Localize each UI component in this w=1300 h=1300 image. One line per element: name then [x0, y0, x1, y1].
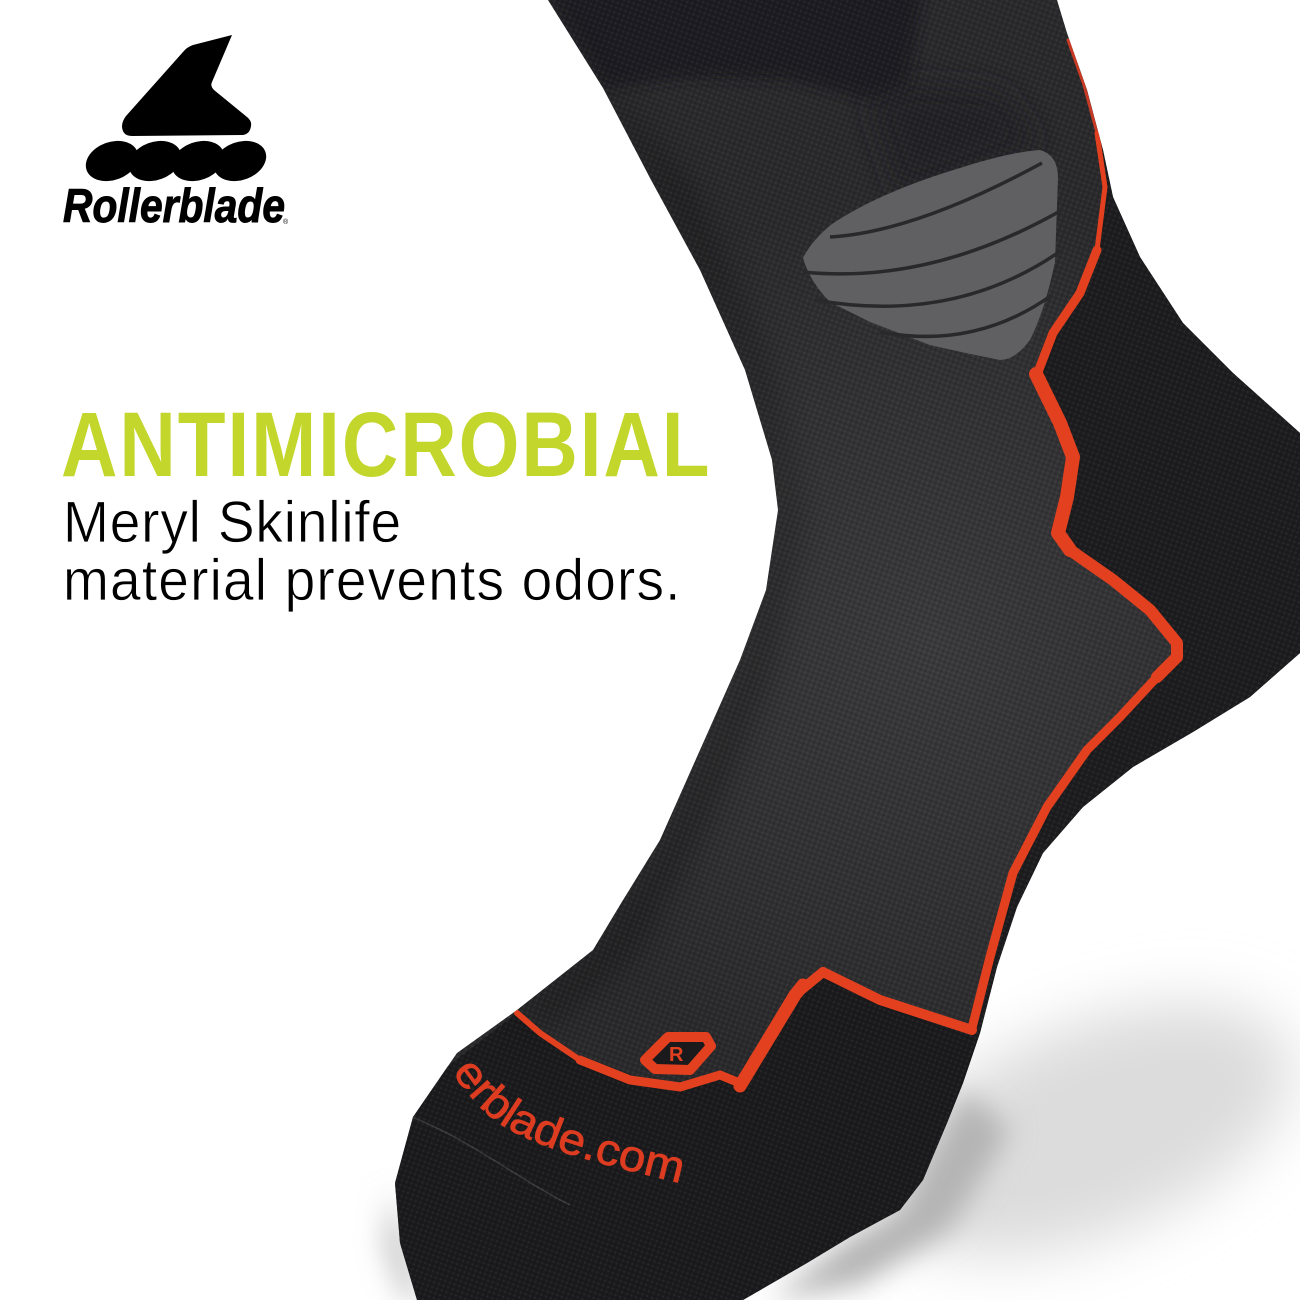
red line: upper ankle — [1038, 40, 1105, 372]
red line: toe arc — [517, 1013, 742, 1087]
heel panel — [972, 0, 1300, 1040]
red line: ankle to heel — [972, 374, 1177, 1028]
toe seam — [412, 1117, 570, 1205]
dark band at top — [540, 0, 925, 100]
toe text: erblade.com — [456, 1064, 682, 1183]
icon: four wheels — [80, 134, 272, 188]
logo — [63, 35, 289, 232]
heading: ANTIMICROBIAL — [61, 394, 710, 496]
floor shadow — [385, 952, 1300, 1300]
left edge shading — [538, 170, 780, 994]
R logo on toe: R — [669, 1044, 684, 1066]
sock — [395, 0, 1300, 1300]
icon: inline skate fin — [122, 35, 251, 136]
registered mark: ® — [283, 218, 289, 226]
knit texture — [380, 0, 1300, 1300]
red line: instep — [740, 972, 972, 1086]
sock base — [380, 0, 1300, 1300]
wordmark: Rollerblade — [63, 179, 285, 232]
body text line two: material prevents odors. — [63, 548, 681, 612]
body text line one: Meryl Skinlife — [63, 490, 401, 554]
toe panel — [380, 970, 985, 1300]
dark shading above patch — [884, 99, 1012, 173]
grey ventilation patch — [803, 150, 1062, 360]
R logo on toe — [645, 1037, 711, 1070]
